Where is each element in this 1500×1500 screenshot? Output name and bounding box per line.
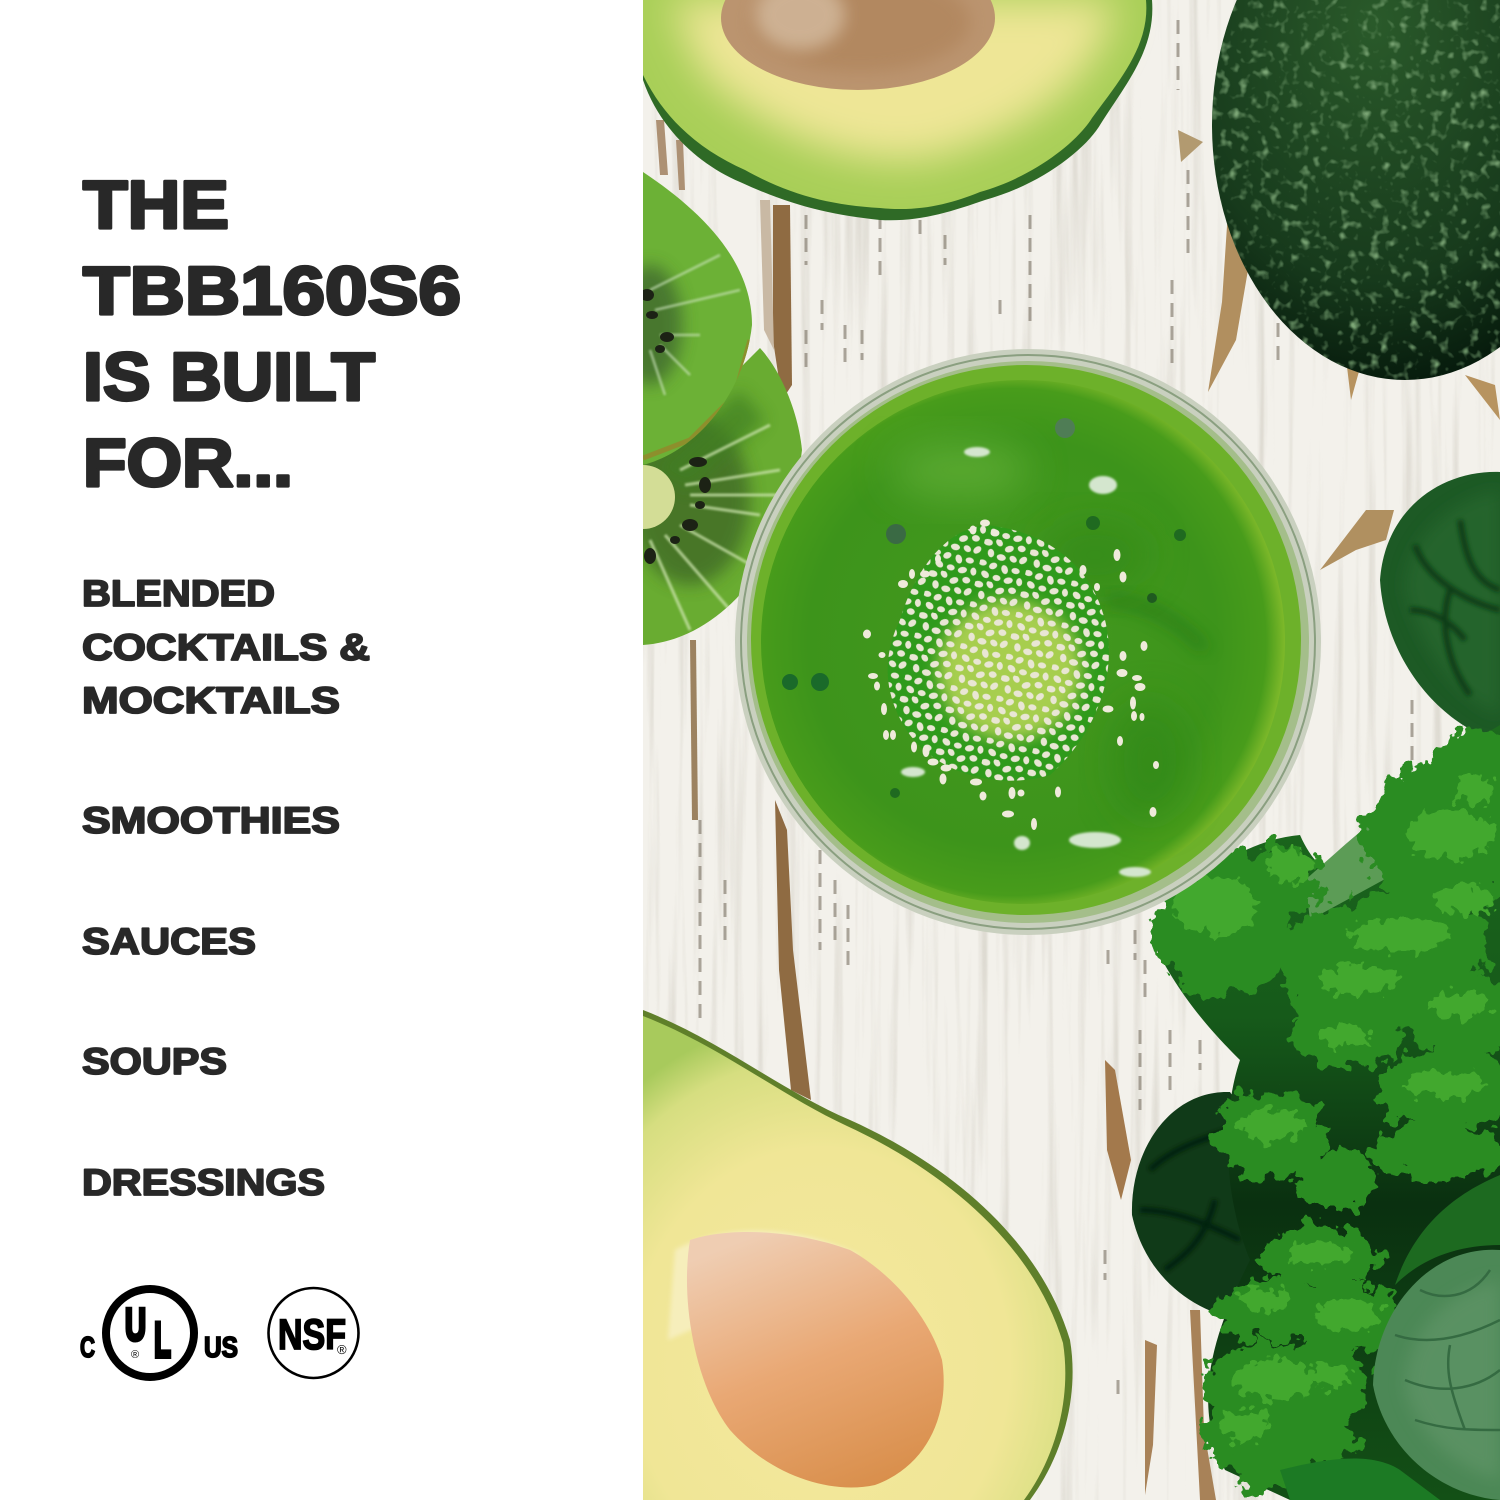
wood tabletop	[643, 0, 1500, 1500]
seed topping	[863, 520, 1159, 830]
smooth leaf at bottom of bunch	[1280, 1458, 1440, 1500]
bubbles and foam flecks	[782, 418, 1186, 877]
heading: IS BUILT	[83, 339, 375, 415]
icon: NSF certification mark: NSF	[278, 1311, 346, 1359]
avocado pit	[721, 0, 995, 90]
kale base	[1140, 720, 1500, 1500]
item: dressings: DRESSINGS	[82, 1162, 325, 1203]
icon: cULus certification mark: U	[125, 1299, 146, 1350]
glass of green smoothie	[735, 349, 1321, 935]
kiwi slice upper	[643, 172, 752, 465]
dark whole avocado	[1212, 0, 1500, 380]
heading: TBB160S6	[83, 253, 461, 329]
kale bright leaf highlights	[1173, 776, 1495, 1441]
item: blended cocktails and mocktails	[82, 573, 370, 721]
icon: NSF certification mark: ®	[337, 1342, 347, 1357]
kale mid-tone leaf clumps	[1155, 730, 1500, 1493]
smooth spinach leaf behind kale	[1395, 1175, 1500, 1285]
kiwi slice lower	[643, 348, 802, 645]
top halved avocado	[643, 0, 1152, 220]
bottom halved avocado	[643, 1010, 1073, 1500]
spinach leaf upper right	[1380, 472, 1500, 742]
icon: cULus certification mark: US	[204, 1332, 238, 1364]
avocado pit	[668, 1231, 944, 1488]
white text panel	[0, 0, 643, 1500]
kiwi slices	[643, 172, 802, 645]
dark spinach leaf lower	[1132, 1092, 1250, 1310]
heading: FOR...	[83, 425, 293, 501]
spinach leaf bottom right	[1373, 1250, 1500, 1500]
list of uses	[82, 573, 370, 1203]
heading: THE	[83, 167, 229, 243]
food photograph panel	[611, 0, 1500, 1500]
kale bunch	[1140, 720, 1500, 1500]
icon: cULus certification mark	[80, 1289, 238, 1377]
item: blended cocktails and mocktails: COCKTAILS &	[82, 627, 370, 668]
icon: NSF certification mark	[268, 1288, 358, 1378]
item: blended cocktails and mocktails: BLENDED	[82, 573, 275, 614]
item: sauces: SAUCES	[82, 921, 256, 962]
kale pale outer leaf	[1308, 827, 1384, 916]
icon: cULus certification mark: ®	[131, 1349, 139, 1361]
heading	[83, 167, 461, 501]
icon: cULus certification mark: L	[154, 1312, 171, 1368]
item: soups: SOUPS	[82, 1041, 227, 1082]
icon: cULus certification mark: C	[80, 1332, 95, 1364]
item: blended cocktails and mocktails: MOCKTAILS	[82, 680, 340, 721]
item: smoothies: SMOOTHIES	[82, 800, 340, 841]
